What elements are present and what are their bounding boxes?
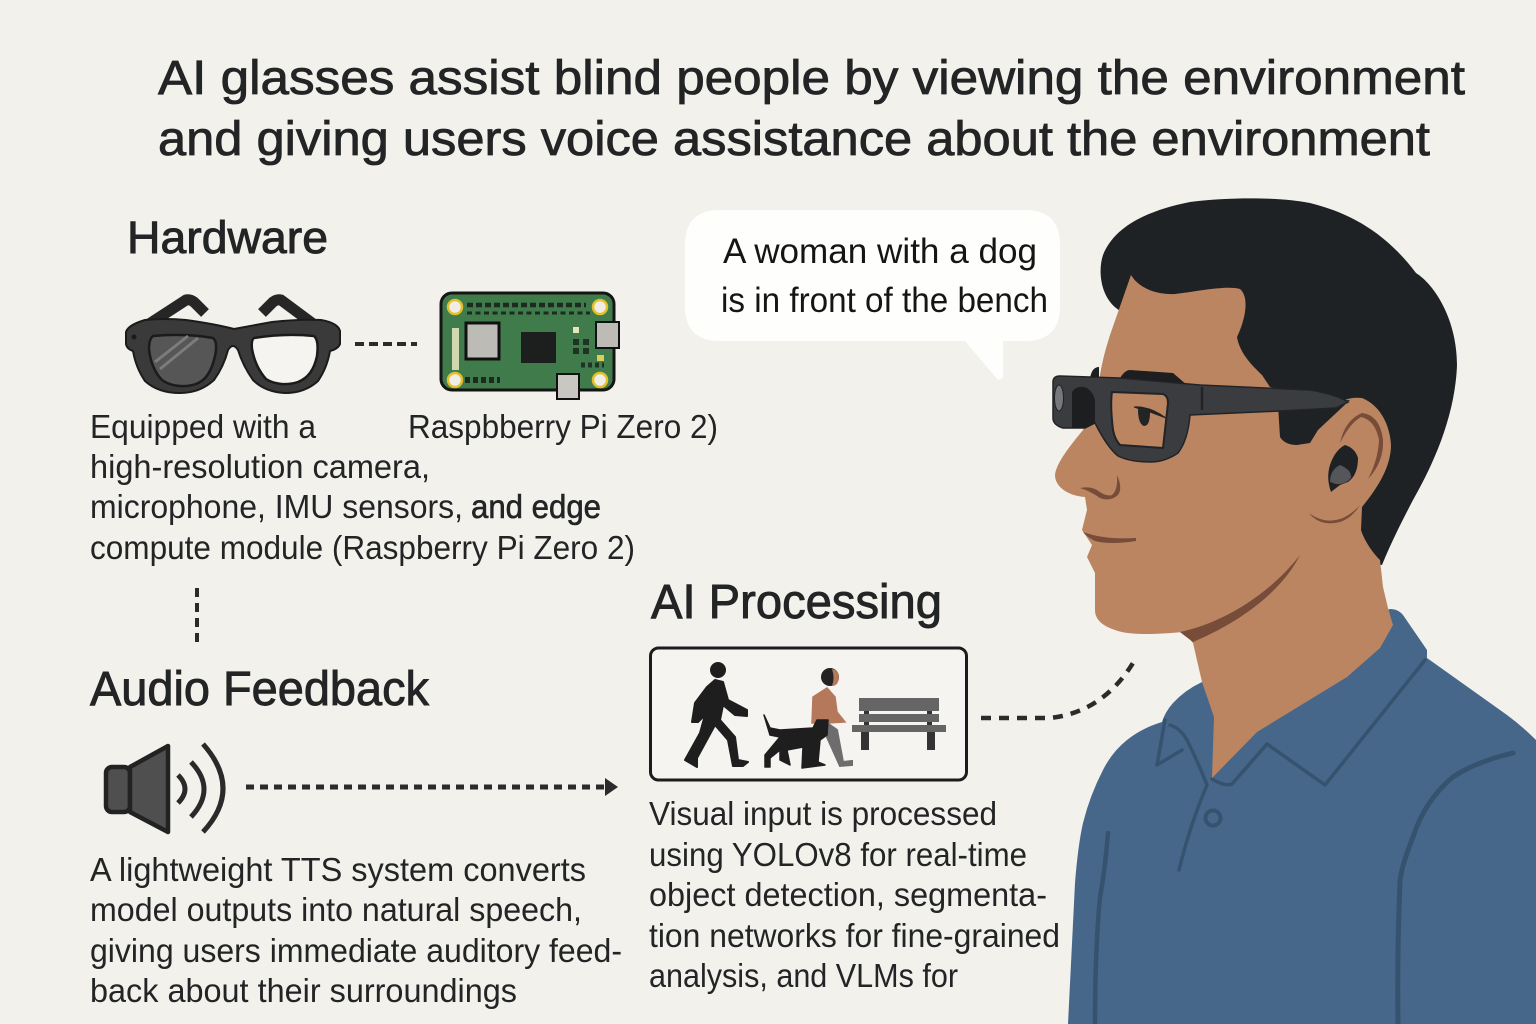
text: audio description: A lightweight TTS system converts bbox=[90, 851, 586, 888]
title: AI glasses assist blind people by viewing the environment bbox=[158, 52, 1465, 105]
face and neck bbox=[1055, 275, 1393, 778]
sideburn bbox=[1278, 400, 1350, 445]
text: AI processing description: using YOLOv8 for real-time bbox=[649, 836, 1027, 873]
label: camera description: and edge bbox=[471, 488, 601, 525]
text: audio description bbox=[90, 851, 622, 1009]
title: and giving users voice assistance about the environment bbox=[158, 113, 1430, 166]
speech bubble: A woman with a dog bbox=[723, 232, 1037, 271]
icon: bench bbox=[852, 698, 946, 750]
text: audio description: back about their surroundings bbox=[90, 972, 517, 1009]
panel: audio feedback bbox=[90, 663, 622, 1009]
connector: AI processing to glasses wearer bbox=[981, 658, 1136, 718]
panel: hardware bbox=[90, 212, 718, 566]
wearable glasses bbox=[1053, 367, 1348, 462]
text: AI processing description: Visual input is processed bbox=[649, 795, 997, 832]
connector: glasses to board bbox=[355, 342, 417, 346]
text: AI processing description: tion networks for fine-grained bbox=[649, 917, 1060, 954]
icon: Raspberry Pi board bbox=[441, 293, 619, 399]
icon: walking man bbox=[685, 663, 748, 767]
icon: speaker bbox=[106, 744, 223, 832]
label: camera description bbox=[90, 408, 635, 566]
arrow: audio to AI processing bbox=[246, 778, 618, 796]
face details bbox=[1080, 413, 1383, 642]
heading: audio feedback: Audio Feedback bbox=[90, 663, 430, 716]
shirt bbox=[1068, 609, 1536, 1024]
text: audio description: model outputs into natural speech, bbox=[90, 891, 582, 928]
icon: smart glasses bbox=[126, 300, 340, 393]
earbud bbox=[1328, 445, 1358, 492]
text: AI processing description bbox=[649, 795, 1060, 994]
icon: woman bbox=[812, 668, 852, 766]
title bbox=[158, 52, 1465, 166]
speech bubble bbox=[685, 210, 1060, 380]
illustration: man wearing AI glasses bbox=[1053, 198, 1536, 1024]
text: AI processing description: analysis, and VLMs for bbox=[649, 957, 958, 994]
text: AI processing description: object detection, segmenta- bbox=[649, 876, 1047, 913]
panel: AI processing bbox=[649, 576, 1060, 994]
label: camera description: compute module (Raspberry Pi Zero 2) bbox=[90, 529, 635, 566]
heading: AI processing: AI Processing bbox=[651, 576, 942, 629]
label: camera description: Equipped with a bbox=[90, 408, 317, 445]
scene: object detection frame bbox=[650, 648, 966, 780]
icon: dog bbox=[764, 715, 828, 768]
connector: hardware to audio bbox=[195, 588, 199, 646]
hair bbox=[1101, 198, 1457, 565]
label: camera description: microphone, IMU sensors, bbox=[90, 488, 463, 525]
speech bubble: is in front of the bench bbox=[721, 281, 1048, 320]
heading: hardware: Hardware bbox=[127, 212, 328, 263]
label: camera description: high-resolution camera, bbox=[90, 448, 430, 485]
text: audio description: giving users immediate auditory feed- bbox=[90, 932, 622, 969]
label: board name: Raspbberry Pi Zero 2) bbox=[408, 408, 718, 445]
